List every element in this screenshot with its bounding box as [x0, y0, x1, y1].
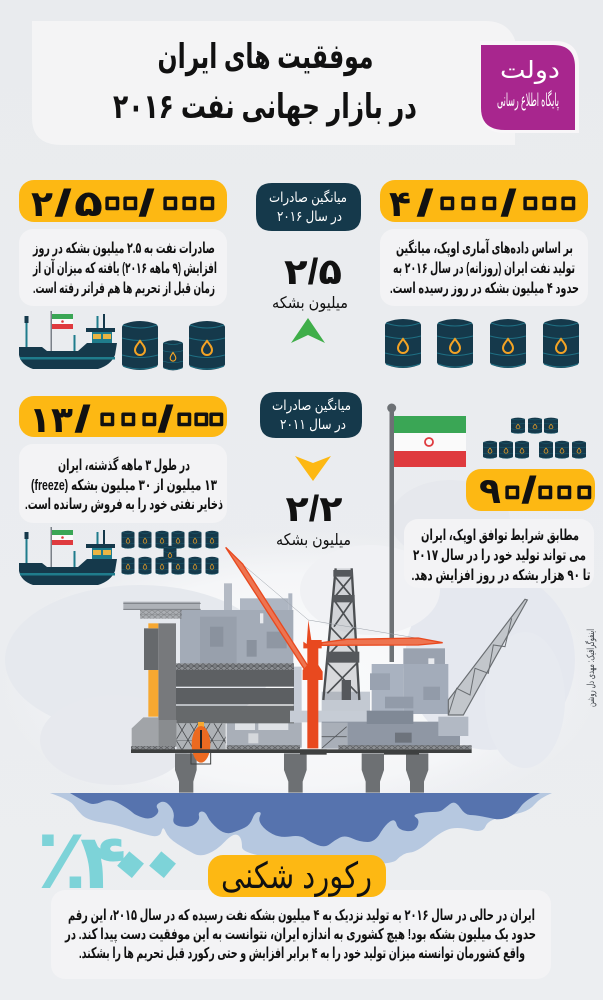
- ship with flag: [19, 527, 117, 585]
- wires: [243, 565, 418, 638]
- text card: [19, 229, 227, 306]
- dark hull block: [160, 663, 294, 723]
- yellow number pill: [466, 469, 595, 511]
- number: ۰۰۰: [166, 382, 235, 449]
- number: /: [138, 183, 156, 225]
- card text: در طول ۳ ماهه گذشته، ایران: [58, 456, 190, 474]
- card text: ایران در حالی در سال ۲۰۱۶ به تولید نزدیک به ۴ میلیون بشکه نفت رسیده که در سال ۲۰۱۵، این رقم: [68, 907, 535, 924]
- dark label: [256, 183, 361, 231]
- card text: [412, 527, 590, 584]
- number: ۰۰۰: [152, 166, 226, 233]
- background clouds: [0, 480, 600, 830]
- legs: [175, 753, 428, 793]
- deck: [131, 745, 472, 755]
- red crane: [226, 547, 443, 748]
- left tower: [132, 623, 177, 747]
- title: موفقیت های ایران: [158, 38, 374, 77]
- 400 percent: ۰: [102, 791, 232, 928]
- text card: [380, 229, 588, 306]
- panel: 2011 average exports: [260, 392, 362, 550]
- number: ۴: [389, 183, 411, 224]
- ship with flag: [19, 311, 117, 369]
- four barrels: [385, 319, 579, 368]
- panel: 2016 average exports: [256, 183, 361, 343]
- number: ۹: [479, 470, 501, 511]
- title panel: [32, 21, 515, 145]
- panel: exports 2,500,000: [19, 166, 227, 370]
- sea: [50, 793, 552, 864]
- credit: اینفوگرافیک: مهدی دل روشن: [585, 629, 597, 707]
- number: [389, 166, 587, 233]
- record-breaking panel: [51, 855, 551, 979]
- orange lifeboat: [192, 722, 210, 763]
- number: [31, 166, 226, 233]
- label text: میانگین صادرات: [272, 397, 351, 414]
- number: /: [521, 470, 538, 512]
- value: ۲/۵: [284, 251, 342, 292]
- logo: [480, 41, 579, 133]
- number: ۵: [74, 183, 103, 224]
- derrick: [323, 568, 359, 700]
- card text: [64, 907, 536, 962]
- card text: زمان قبل از تحریم ها هم فراتر رفته است.: [33, 280, 215, 297]
- 400 percent: ٪: [36, 812, 87, 906]
- panel: 90,000: [404, 455, 603, 588]
- number: ۰۰۰: [89, 382, 168, 449]
- yellow number pill: [19, 396, 227, 437]
- label text: [269, 189, 347, 225]
- title: [113, 38, 417, 127]
- lifeboat frame: [177, 723, 226, 764]
- icon: yellow down chevron: [295, 456, 331, 481]
- number: ۰۰۰: [429, 166, 508, 233]
- 400 percent: ۰: [70, 791, 200, 928]
- heading pill: [208, 855, 386, 897]
- number: /: [500, 183, 518, 225]
- card text: صادرات نفت به ۲.۵ میلیون بشکه در روز: [32, 240, 215, 257]
- panel: daily production 4,000,000: [380, 166, 588, 368]
- rear structures: [180, 583, 302, 748]
- number: ۰۰۰: [527, 455, 603, 522]
- flag pole: [387, 404, 396, 662]
- sea water: [70, 793, 540, 846]
- card text: افزایش (۹ ماهه ۲۰۱۶) یافته که میزان آن از: [32, 259, 217, 277]
- right crane: [448, 599, 527, 715]
- label text: میانگین صادرات: [269, 189, 347, 206]
- number: ۰۰: [94, 166, 149, 233]
- card text: [390, 239, 579, 297]
- number: [479, 455, 603, 522]
- helideck truss: [123, 602, 201, 619]
- number: ۱۳: [29, 399, 73, 440]
- label text: در سال ۲۰۱۶: [277, 208, 342, 225]
- icon: green up arrow: [291, 318, 325, 343]
- unit: میلیون بشکه: [272, 295, 348, 313]
- number: /: [74, 399, 92, 441]
- barrel stack: [483, 418, 586, 459]
- heading: رکورد شکنی: [221, 855, 372, 897]
- 400 percent: ۴: [80, 820, 126, 905]
- card text: [32, 240, 217, 297]
- sea foam: [50, 793, 552, 864]
- right structure: [290, 648, 468, 749]
- panel: 13,000,000: [19, 382, 235, 585]
- barrel grid: [121, 531, 219, 575]
- label text: [272, 397, 351, 433]
- card text: ۱۳ میلیون از ۳۰ میلیون بشکه (freeze): [31, 477, 217, 494]
- 400 percent: [36, 791, 232, 928]
- text card: [19, 444, 227, 523]
- title: در بازار جهانی نفت ۲۰۱۶: [113, 88, 417, 127]
- yellow number pill: [19, 180, 227, 222]
- text card: [51, 890, 551, 979]
- number: /: [54, 183, 73, 225]
- logo: دولت: [500, 57, 560, 84]
- dark label: [260, 392, 362, 438]
- number: /: [416, 183, 435, 225]
- label text: در سال ۲۰۱۱: [280, 416, 346, 433]
- unit: میلیون بشکه: [276, 532, 351, 550]
- number: ۲: [31, 183, 53, 224]
- number: ۰۰۰: [512, 166, 587, 233]
- yellow number pill: [380, 180, 588, 222]
- Iranian flag: [394, 416, 466, 467]
- card text: [25, 456, 223, 513]
- oil platform: [123, 547, 527, 793]
- card text: ذخایر نفتی خود را به فروش رسانده است.: [25, 496, 223, 513]
- number: /: [157, 399, 175, 441]
- number: [29, 382, 235, 449]
- value: ۲/۲: [286, 488, 343, 529]
- barrels: [122, 321, 225, 370]
- number: ۰: [494, 455, 531, 522]
- text card: [404, 519, 594, 588]
